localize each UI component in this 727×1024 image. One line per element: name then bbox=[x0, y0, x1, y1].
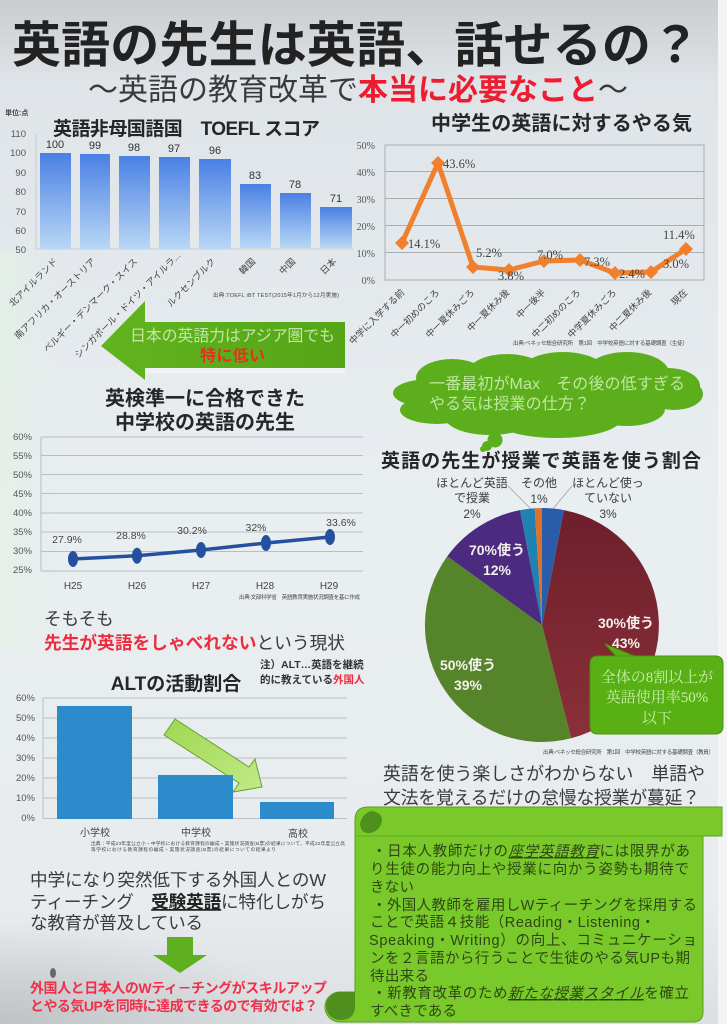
panel: motivation line chart bbox=[347, 112, 704, 347]
source: 等学校における教育課程の編成・実施状況調査(B票)の結果についての結果より bbox=[91, 846, 276, 853]
data labels: 7.3% bbox=[584, 255, 610, 269]
chart heading: 中学校の英語の先生 bbox=[115, 411, 295, 434]
data labels: 43.6% bbox=[443, 157, 475, 171]
scroll text: ・外国人教師を雇用しWティーチングを採用する bbox=[372, 897, 697, 914]
period labels bbox=[347, 287, 689, 346]
y axis labels bbox=[16, 693, 36, 824]
country labels: 北アイルランド bbox=[7, 256, 59, 309]
scroll text: ことで英語４技能（Reading・Listening・ bbox=[370, 913, 655, 931]
country labels: 南アフリカ・オーストリア bbox=[12, 256, 97, 341]
chart heading: 英検準一に合格できた bbox=[105, 387, 305, 410]
note: ALT definition bbox=[260, 658, 365, 686]
country labels: ベルギー・デンマーク・スイス bbox=[41, 256, 139, 354]
arrow: down bbox=[153, 937, 207, 973]
bar values: 78 bbox=[289, 179, 301, 191]
bar values bbox=[46, 139, 342, 205]
unit label: 単位:点 bbox=[5, 108, 28, 117]
text block: team teaching decline: ティーチング 受験英語に特化しがち bbox=[30, 892, 326, 912]
chart heading bbox=[105, 387, 305, 434]
text block: boring lessons: 文法を覚えるだけの怠慢な授業が蔓延？ bbox=[383, 788, 700, 808]
text block: team teaching decline bbox=[30, 870, 326, 933]
y axis labels: 40% bbox=[13, 508, 33, 519]
y axis labels: 25% bbox=[13, 565, 33, 576]
arrow callout: Japan is low: 特に低い bbox=[200, 346, 265, 365]
data labels: 2.4% bbox=[619, 267, 645, 281]
category labels bbox=[80, 826, 308, 840]
conclusion text bbox=[30, 980, 327, 1014]
y axis labels: 110 bbox=[11, 129, 26, 140]
data labels: 3.8% bbox=[498, 269, 524, 283]
period labels: 中一後半 bbox=[514, 287, 547, 320]
y axis labels: 0% bbox=[362, 276, 375, 287]
text block: team teaching decline: な教育が普及している bbox=[30, 913, 203, 933]
country labels: 中国 bbox=[277, 256, 297, 276]
scroll text: ンを２言語から行うことで生徒のやる気UPも期 bbox=[370, 950, 690, 967]
y axis labels: 20% bbox=[16, 773, 36, 784]
outside labels: ほとんど英語 bbox=[436, 476, 508, 490]
callout: over 80 percent bbox=[590, 644, 723, 734]
bar values: 99 bbox=[89, 140, 101, 152]
y axis labels: 40% bbox=[357, 168, 375, 179]
data labels: 28.8% bbox=[116, 530, 146, 542]
grid bbox=[43, 698, 347, 818]
bar values: 97 bbox=[168, 143, 180, 155]
chart heading: ALTの活動割合 bbox=[111, 673, 241, 695]
outside labels: で授業 bbox=[454, 490, 490, 505]
thought cloud: やる気は授業の仕方？ bbox=[429, 395, 590, 413]
blue line bbox=[73, 537, 330, 559]
bar values: 100 bbox=[46, 139, 64, 151]
y axis labels: 55% bbox=[13, 451, 33, 462]
grid bbox=[41, 437, 363, 571]
panel: ALT bar chart bbox=[16, 673, 347, 853]
y axis labels: 10% bbox=[357, 249, 375, 260]
text block: teachers cannot speak: 先生が英語をしゃべれないという現状 bbox=[44, 632, 345, 653]
panel: TOEFL bar chart bbox=[5, 108, 353, 360]
category labels: 高校 bbox=[288, 827, 308, 840]
y axis labels: 60% bbox=[16, 693, 36, 704]
thought cloud: 一番最初がMax その後の低すぎる bbox=[429, 375, 685, 393]
text block: teachers cannot speak bbox=[44, 609, 345, 653]
period labels: 現在 bbox=[669, 287, 689, 307]
slice labels: 50%使う bbox=[440, 657, 496, 673]
panel: pie chart bbox=[381, 449, 714, 756]
y axis labels: 0% bbox=[21, 813, 36, 824]
chart heading: 中学生の英語に対するやる気 bbox=[431, 112, 692, 135]
trend arrow bbox=[164, 719, 262, 792]
year labels bbox=[64, 581, 339, 592]
y axis labels: 60% bbox=[13, 432, 33, 443]
scroll text: すべきである bbox=[370, 1003, 457, 1020]
category labels: 中学校 bbox=[181, 826, 211, 839]
y axis labels: 70 bbox=[15, 207, 26, 218]
y axis labels: 100 bbox=[10, 148, 26, 159]
callout: over 80 percent: 全体の8割以上が bbox=[601, 668, 713, 686]
outside labels: 3% bbox=[599, 507, 617, 521]
year labels: H27 bbox=[192, 581, 211, 592]
slice labels: 70%使う bbox=[469, 542, 525, 558]
source bbox=[91, 840, 345, 853]
source: 出典:文部科学省 英語教育実施状況調査を基に作成 bbox=[239, 593, 360, 601]
y axis labels: 35% bbox=[13, 527, 33, 538]
data labels: 27.9% bbox=[52, 534, 82, 546]
y axis labels bbox=[13, 432, 33, 576]
data labels: 30.2% bbox=[177, 525, 207, 537]
data labels: 14.1% bbox=[408, 237, 440, 251]
outside labels: ほとんど使っ bbox=[572, 475, 644, 490]
markers bbox=[68, 529, 335, 567]
text block: boring lessons bbox=[383, 764, 705, 808]
year labels: H25 bbox=[64, 581, 83, 592]
note: ALT definition: 的に教えている外国人 bbox=[260, 673, 365, 686]
year labels: H28 bbox=[256, 581, 275, 592]
country labels: ルクセンブルク bbox=[164, 256, 217, 309]
y axis labels: 30% bbox=[16, 753, 36, 764]
period labels: 中二初めのころ bbox=[529, 287, 582, 340]
year labels: H29 bbox=[320, 581, 339, 592]
data labels bbox=[52, 517, 356, 546]
source: 出典:ベネッセ総合研究所 第1回 中学校英語に対する基礎調査（教員） bbox=[543, 748, 714, 756]
scroll text: Speaking・Writing）の向上、コミュニケーショ bbox=[369, 932, 697, 949]
data labels: 3.0% bbox=[663, 257, 689, 271]
y axis labels: 50% bbox=[357, 141, 375, 152]
source: 出典：平成23年度公立小・中学校における教育課程の編成・実施状況調査(B票)の結果について、平成22年度公立高 bbox=[91, 840, 345, 847]
scroll text: きない bbox=[370, 879, 414, 896]
arrow callout: Japan is low: 日本の英語力はアジア圏でも bbox=[130, 327, 335, 345]
y axis labels: 50% bbox=[13, 470, 33, 481]
outside labels: その他 bbox=[521, 476, 557, 490]
chart heading: 英語非母国語国 TOEFL スコア bbox=[53, 118, 320, 140]
period labels: 中一初めのころ bbox=[388, 287, 441, 340]
data labels: 7.0% bbox=[537, 248, 563, 262]
subtitle: ～英語の教育改革で本当に必要なこと～ bbox=[88, 74, 628, 107]
country labels: 韓国 bbox=[237, 256, 257, 276]
period labels: 中一夏休みごろ bbox=[423, 287, 476, 340]
y axis labels: 80 bbox=[15, 187, 26, 198]
slice labels: 43% bbox=[612, 635, 641, 651]
y axis labels: 40% bbox=[16, 733, 36, 744]
callout: over 80 percent: 以下 bbox=[642, 710, 672, 727]
y axis labels: 50% bbox=[16, 713, 36, 724]
source: 出典:TOEFL iBT TEST(2015年1月から12月実施) bbox=[213, 291, 339, 299]
callout: over 80 percent: 英語使用率50% bbox=[606, 688, 708, 706]
period labels: 中学に入学する前 bbox=[347, 287, 406, 346]
y axis labels bbox=[357, 141, 375, 287]
data labels: 33.6% bbox=[326, 517, 356, 529]
pie slices bbox=[425, 508, 659, 742]
y axis labels: 50 bbox=[15, 245, 26, 256]
chart heading: 英語の先生が授業で英語を使う割合 bbox=[381, 449, 701, 472]
slice labels: 12% bbox=[483, 562, 512, 578]
text block: teachers cannot speak: そもそも bbox=[44, 609, 114, 629]
country labels: 日本 bbox=[318, 256, 338, 276]
slice labels: 39% bbox=[454, 677, 483, 693]
title: 英語の先生は英語、話せるの？ bbox=[12, 19, 700, 73]
y axis labels: 10% bbox=[16, 793, 36, 804]
scroll text: り生徒の能力向上や授業に向かう姿勢も期待で bbox=[370, 861, 689, 878]
bars bbox=[40, 153, 352, 249]
conclusion text: 外国人と日本人のWティ－チングがスキルアップ bbox=[30, 980, 327, 996]
orange line bbox=[402, 163, 686, 273]
y axis labels: 30% bbox=[357, 195, 375, 206]
data markers bbox=[395, 156, 693, 280]
bar values: 98 bbox=[128, 142, 140, 154]
scroll curls bbox=[360, 811, 382, 833]
y axis labels bbox=[10, 129, 26, 256]
data labels: 32% bbox=[245, 522, 267, 534]
decorative dot bbox=[50, 968, 56, 978]
data labels: 5.2% bbox=[476, 246, 502, 260]
period labels: 中一夏休み後 bbox=[465, 287, 511, 333]
scroll text: 待出来る bbox=[370, 968, 429, 985]
data labels bbox=[408, 157, 695, 283]
text block: boring lessons: 英語を使う楽しさがわからない 単語や bbox=[383, 764, 705, 784]
arrow callout: Japan is low bbox=[101, 301, 345, 380]
scroll text bbox=[369, 843, 697, 1020]
outside labels bbox=[436, 475, 644, 521]
country labels bbox=[7, 250, 338, 360]
outside labels: 2% bbox=[463, 507, 481, 521]
period labels: 中二夏休み後 bbox=[607, 287, 653, 333]
text block: team teaching decline: 中学になり突然低下する外国人とのW bbox=[30, 870, 326, 890]
scroll panel bbox=[325, 807, 722, 1022]
outside labels: ていない bbox=[584, 491, 632, 505]
slice labels bbox=[440, 542, 654, 693]
panel: Eiken line chart bbox=[13, 387, 363, 601]
conclusion text: とやる気UPを同時に達成できるので有効では？ bbox=[30, 998, 318, 1014]
source: 出典:ベネッセ総合研究所 第1回 中学校英語に対する基礎調査（生徒） bbox=[513, 339, 688, 347]
country labels: シンガポール・ドイツ・アイルラ... bbox=[73, 250, 182, 360]
scroll text: ・新教育改革のため新たな授業スタイルを確立 bbox=[372, 985, 689, 1002]
y axis labels: 45% bbox=[13, 489, 33, 500]
y axis labels: 90 bbox=[15, 168, 26, 179]
data labels: 11.4% bbox=[663, 228, 695, 242]
y axis labels: 30% bbox=[13, 546, 33, 557]
year labels: H26 bbox=[128, 581, 147, 592]
bars bbox=[57, 706, 334, 819]
slice labels: 30%使う bbox=[598, 615, 654, 631]
bar values: 83 bbox=[249, 170, 261, 182]
outside labels: 1% bbox=[530, 492, 548, 506]
thought cloud bbox=[393, 352, 703, 452]
note: ALT definition: 注）ALT…英語を継続 bbox=[260, 658, 364, 671]
y axis labels: 60 bbox=[15, 226, 26, 237]
category labels: 小学校 bbox=[80, 826, 110, 839]
bar values: 71 bbox=[330, 193, 342, 205]
plot grid bbox=[385, 145, 704, 280]
y axis labels: 20% bbox=[357, 222, 375, 233]
scroll text: ・日本人教師だけの座学英語教育には限界があ bbox=[372, 843, 690, 860]
period labels: 中学夏休みごろ bbox=[565, 287, 618, 340]
bar values: 96 bbox=[209, 145, 221, 157]
